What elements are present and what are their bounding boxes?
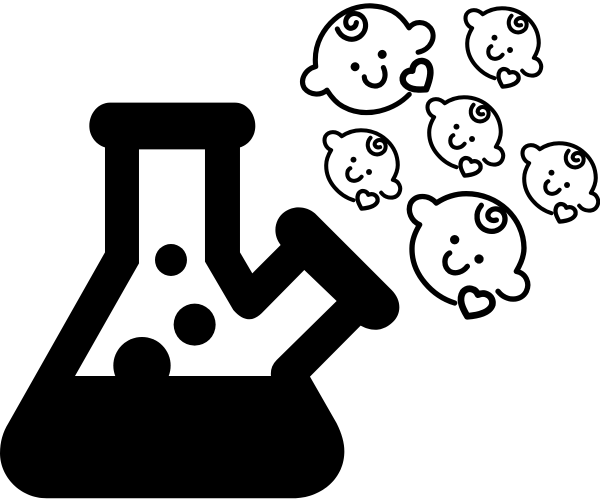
bubble small — [155, 244, 187, 276]
bubble large — [113, 337, 171, 394]
baby: bottom large — [409, 194, 528, 316]
flask body — [0, 103, 399, 498]
baby: right — [523, 143, 598, 222]
baby: left small — [325, 130, 400, 209]
bubble medium — [174, 304, 216, 346]
flask — [0, 103, 399, 498]
baby: top large — [296, 0, 453, 139]
flask interior — [75, 149, 337, 376]
baby: middle — [428, 97, 503, 176]
baby: top right — [466, 8, 541, 87]
